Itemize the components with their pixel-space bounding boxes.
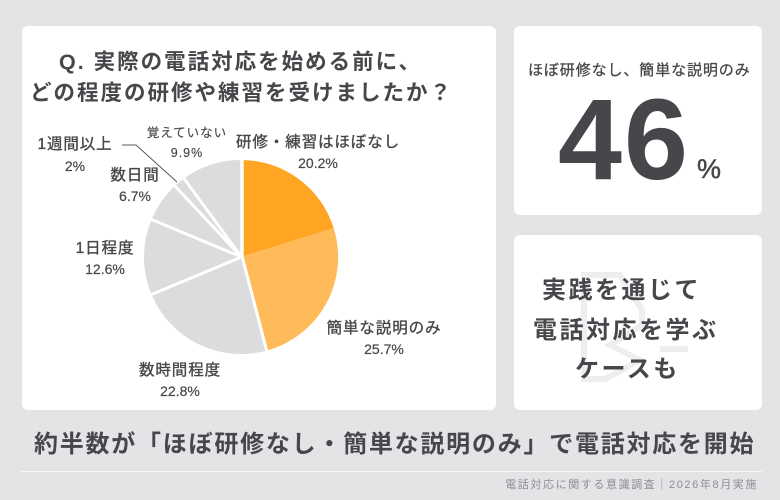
title: survey question: どの程度の研修や練習を受けましたか？	[30, 80, 453, 104]
label: over one week: 2%	[65, 158, 85, 174]
stat value 46: 46	[558, 76, 690, 204]
callout text: ケースも	[575, 356, 680, 383]
slice: do not remember 9.9%	[184, 160, 241, 257]
title: survey question: Q. 実際の電話対応を始める前に、	[59, 50, 422, 74]
label: do not remember	[147, 126, 227, 160]
label: one day	[76, 240, 134, 276]
label: brief explanation only	[327, 320, 441, 356]
stat caption: ほぼ研修なし、簡単な説明のみ	[528, 62, 751, 79]
pie chart	[144, 160, 338, 354]
panel: 46 percent stat	[514, 26, 762, 215]
label: hardly any training: 研修・練習はほぼなし	[236, 134, 400, 151]
label: several hours	[139, 362, 221, 398]
icon: faint watermark	[581, 272, 688, 382]
label: one day: 1日程度	[76, 240, 134, 257]
title: survey question	[30, 50, 453, 104]
label: several days: 6.7%	[119, 188, 151, 204]
label: do not remember: 9.9%	[171, 146, 203, 160]
label: hardly any training: 20.2%	[298, 154, 338, 170]
label: brief explanation only: 25.7%	[364, 340, 404, 356]
label: several hours: 22.8%	[160, 382, 200, 398]
label: hardly any training	[236, 134, 400, 170]
slice: over one week 2%	[174, 179, 241, 257]
label: one day: 12.6%	[85, 260, 125, 276]
label: several hours: 数時間程度	[139, 362, 221, 379]
label: several days	[110, 166, 160, 204]
label: do not remember: 覚えていない	[147, 126, 227, 140]
slice: brief explanation only 25.7%	[241, 228, 338, 351]
slice: several hours 22.8%	[152, 257, 266, 354]
label: over one week: 1週間以上	[37, 136, 113, 153]
source note: 電話対応に関する意識調査｜2026年8月実施	[505, 479, 758, 491]
panel: learning through practice	[514, 235, 762, 410]
slice: several days 6.7%	[152, 186, 241, 257]
slice: hardly any training 20.2%	[241, 160, 334, 257]
stat percent sign: %	[697, 154, 721, 184]
headline conclusion: 約半数が「ほぼ研修なし・簡単な説明のみ」で電話対応を開始	[34, 431, 755, 458]
callout text: 電話対応を学ぶ	[533, 316, 718, 344]
label: several days: 数日間	[110, 167, 160, 184]
callout text	[533, 277, 718, 383]
panel: question and pie chart	[22, 26, 496, 410]
leader line: over one week	[122, 144, 178, 182]
label: brief explanation only: 簡単な説明のみ	[327, 320, 441, 337]
callout text: 実践を通じて	[542, 277, 701, 304]
label: over one week	[37, 136, 113, 174]
slice: one day 12.6%	[144, 220, 241, 294]
